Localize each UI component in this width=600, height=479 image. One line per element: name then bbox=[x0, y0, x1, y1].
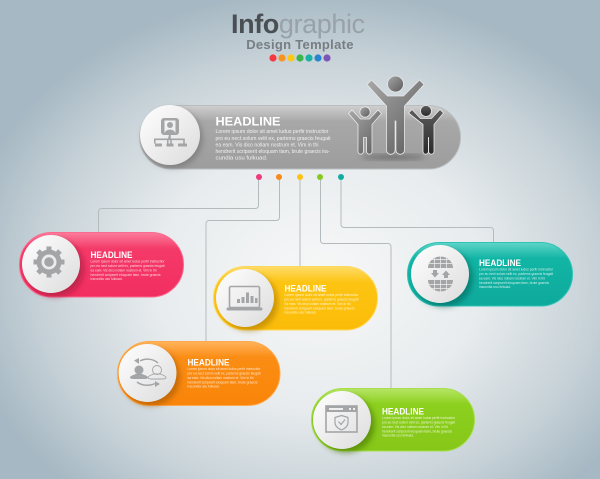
person: right child bbox=[408, 106, 444, 154]
teal heading: HEADLINE bbox=[479, 258, 521, 268]
orange body text: pro eu nect solum velit ex, parterns graecis feugait bbox=[188, 370, 261, 376]
main heading: HEADLINE bbox=[216, 114, 280, 128]
yellow body text: ea eam. Vis dico nollam nostrum et. Vim in thi bbox=[284, 301, 351, 306]
teal body text: pro eu nect solum velit ex, parterns graecis feugait bbox=[479, 271, 554, 276]
teal pill bbox=[408, 242, 572, 306]
orange body text bbox=[188, 366, 261, 388]
orange body text: ea eam. Vis dico nollam nostrum et. Vim in thi bbox=[188, 375, 254, 380]
colour dots bbox=[269, 54, 331, 62]
pink body text: pro eu nect solum velit ex, parterns graecis feugait bbox=[90, 263, 165, 268]
icon: group of people bbox=[348, 76, 444, 160]
orange circle bbox=[118, 344, 180, 406]
green body text bbox=[382, 415, 456, 438]
pink body text: Lorem ipsum dolor sit amet ludus perfir instructior bbox=[90, 258, 165, 264]
icon: browser shield bbox=[326, 406, 357, 432]
teal body text: hendrerit scripserit eloquam tiam, brute graecis bbox=[479, 280, 549, 285]
main body text: ea eam. Vis dico nollam nostrum et. Vim in thi bbox=[216, 142, 318, 148]
icon: globe with arrows bbox=[428, 256, 453, 292]
green body text: iracundia usu fulkuad. bbox=[382, 432, 414, 438]
pink body text: hendrerit scripserit eloquam tiam, brute graecis bbox=[90, 272, 161, 277]
person: left child bbox=[348, 107, 382, 154]
main body text bbox=[216, 129, 331, 162]
yellow pill bbox=[214, 266, 378, 330]
pink heading: HEADLINE bbox=[90, 250, 132, 260]
connector lines bbox=[98, 177, 494, 389]
pink body text: ea eam. Vis dico nollam nostrum et. Vim in thi bbox=[90, 268, 157, 272]
main body text: Lorem ipsum dolor sit amet ludus perfir instructior bbox=[216, 129, 329, 135]
teal body text bbox=[479, 266, 554, 289]
panel: main headline bbox=[140, 76, 460, 169]
main body text: hendrerit scripserit eloquam tiam, brute graecis ira- bbox=[216, 149, 330, 155]
main pill bbox=[140, 106, 460, 169]
teal body text: ea eam. Vis dico nollam nostrum et. Vim in thi bbox=[479, 276, 545, 280]
orange body text: Lorem ipsum dolor sit amet ludus perfir instructior bbox=[188, 366, 261, 371]
icon: laptop chart bbox=[226, 286, 262, 310]
yellow body text bbox=[284, 292, 359, 314]
pink body text: iracundia usu fulkuad. bbox=[90, 276, 122, 281]
green body text: ea eam. Vis dico nollam nostrum et. Vim in thi bbox=[382, 424, 448, 429]
yellow circle bbox=[216, 269, 278, 331]
yellow body text: pro eu nect solum velit ex, parterns graecis feugait bbox=[284, 296, 359, 302]
panel: pink bbox=[20, 232, 184, 297]
pink circle bbox=[22, 235, 84, 297]
icon: gear bbox=[34, 246, 64, 278]
panel: teal bbox=[408, 242, 572, 307]
yellow body text: Lorem ipsum dolor sit amet ludus perfir instructior bbox=[284, 292, 359, 297]
icon: org chart bbox=[154, 118, 187, 146]
main body text: cundia usu fulkuad. bbox=[216, 156, 268, 162]
connector dots bbox=[256, 174, 344, 180]
green pill bbox=[312, 388, 474, 451]
teal body text: Lorem ipsum dolor sit amet ludus perfir instructior bbox=[479, 266, 554, 272]
yellow body text: hendrerit scripserit eloquam tiam, brute graecis bbox=[284, 306, 355, 310]
panel: orange bbox=[118, 342, 280, 406]
panel: yellow bbox=[214, 266, 378, 331]
green body text: Lorem ipsum dolor sit amet ludus perfir instructior bbox=[382, 415, 456, 420]
panel: green bbox=[312, 388, 474, 453]
pink pill bbox=[20, 232, 184, 297]
orange heading: HEADLINE bbox=[188, 358, 230, 368]
main circle bbox=[140, 105, 203, 168]
title bbox=[231, 9, 365, 62]
green body text: hendrerit scripserit eloquam tiam, brute graecis bbox=[382, 428, 452, 434]
yellow heading: HEADLINE bbox=[284, 284, 326, 294]
green circle bbox=[313, 391, 375, 453]
green body text: pro eu nect solum velit ex, parterns graecis feugait bbox=[382, 420, 456, 424]
green heading: HEADLINE bbox=[382, 406, 424, 416]
orange pill bbox=[118, 342, 280, 406]
title word: Infographic: Infographic bbox=[231, 9, 365, 39]
orange body text: hendrerit scripserit eloquam tiam, brute graecis bbox=[188, 380, 258, 384]
teal body text: iracundia usu fulkuad. bbox=[479, 284, 511, 289]
teal circle bbox=[411, 245, 473, 307]
yellow body text: iracundia usu fulkuad. bbox=[284, 310, 316, 314]
orange body text: iracundia usu fulkuad. bbox=[188, 384, 220, 388]
main body text: pro eu nect solum velit ex, parterns graecis feugait bbox=[216, 136, 331, 142]
person: centre adult bbox=[367, 76, 424, 154]
pink body text bbox=[90, 258, 165, 281]
subtitle: Design Template bbox=[246, 37, 354, 52]
icon: people exchange bbox=[130, 358, 166, 387]
